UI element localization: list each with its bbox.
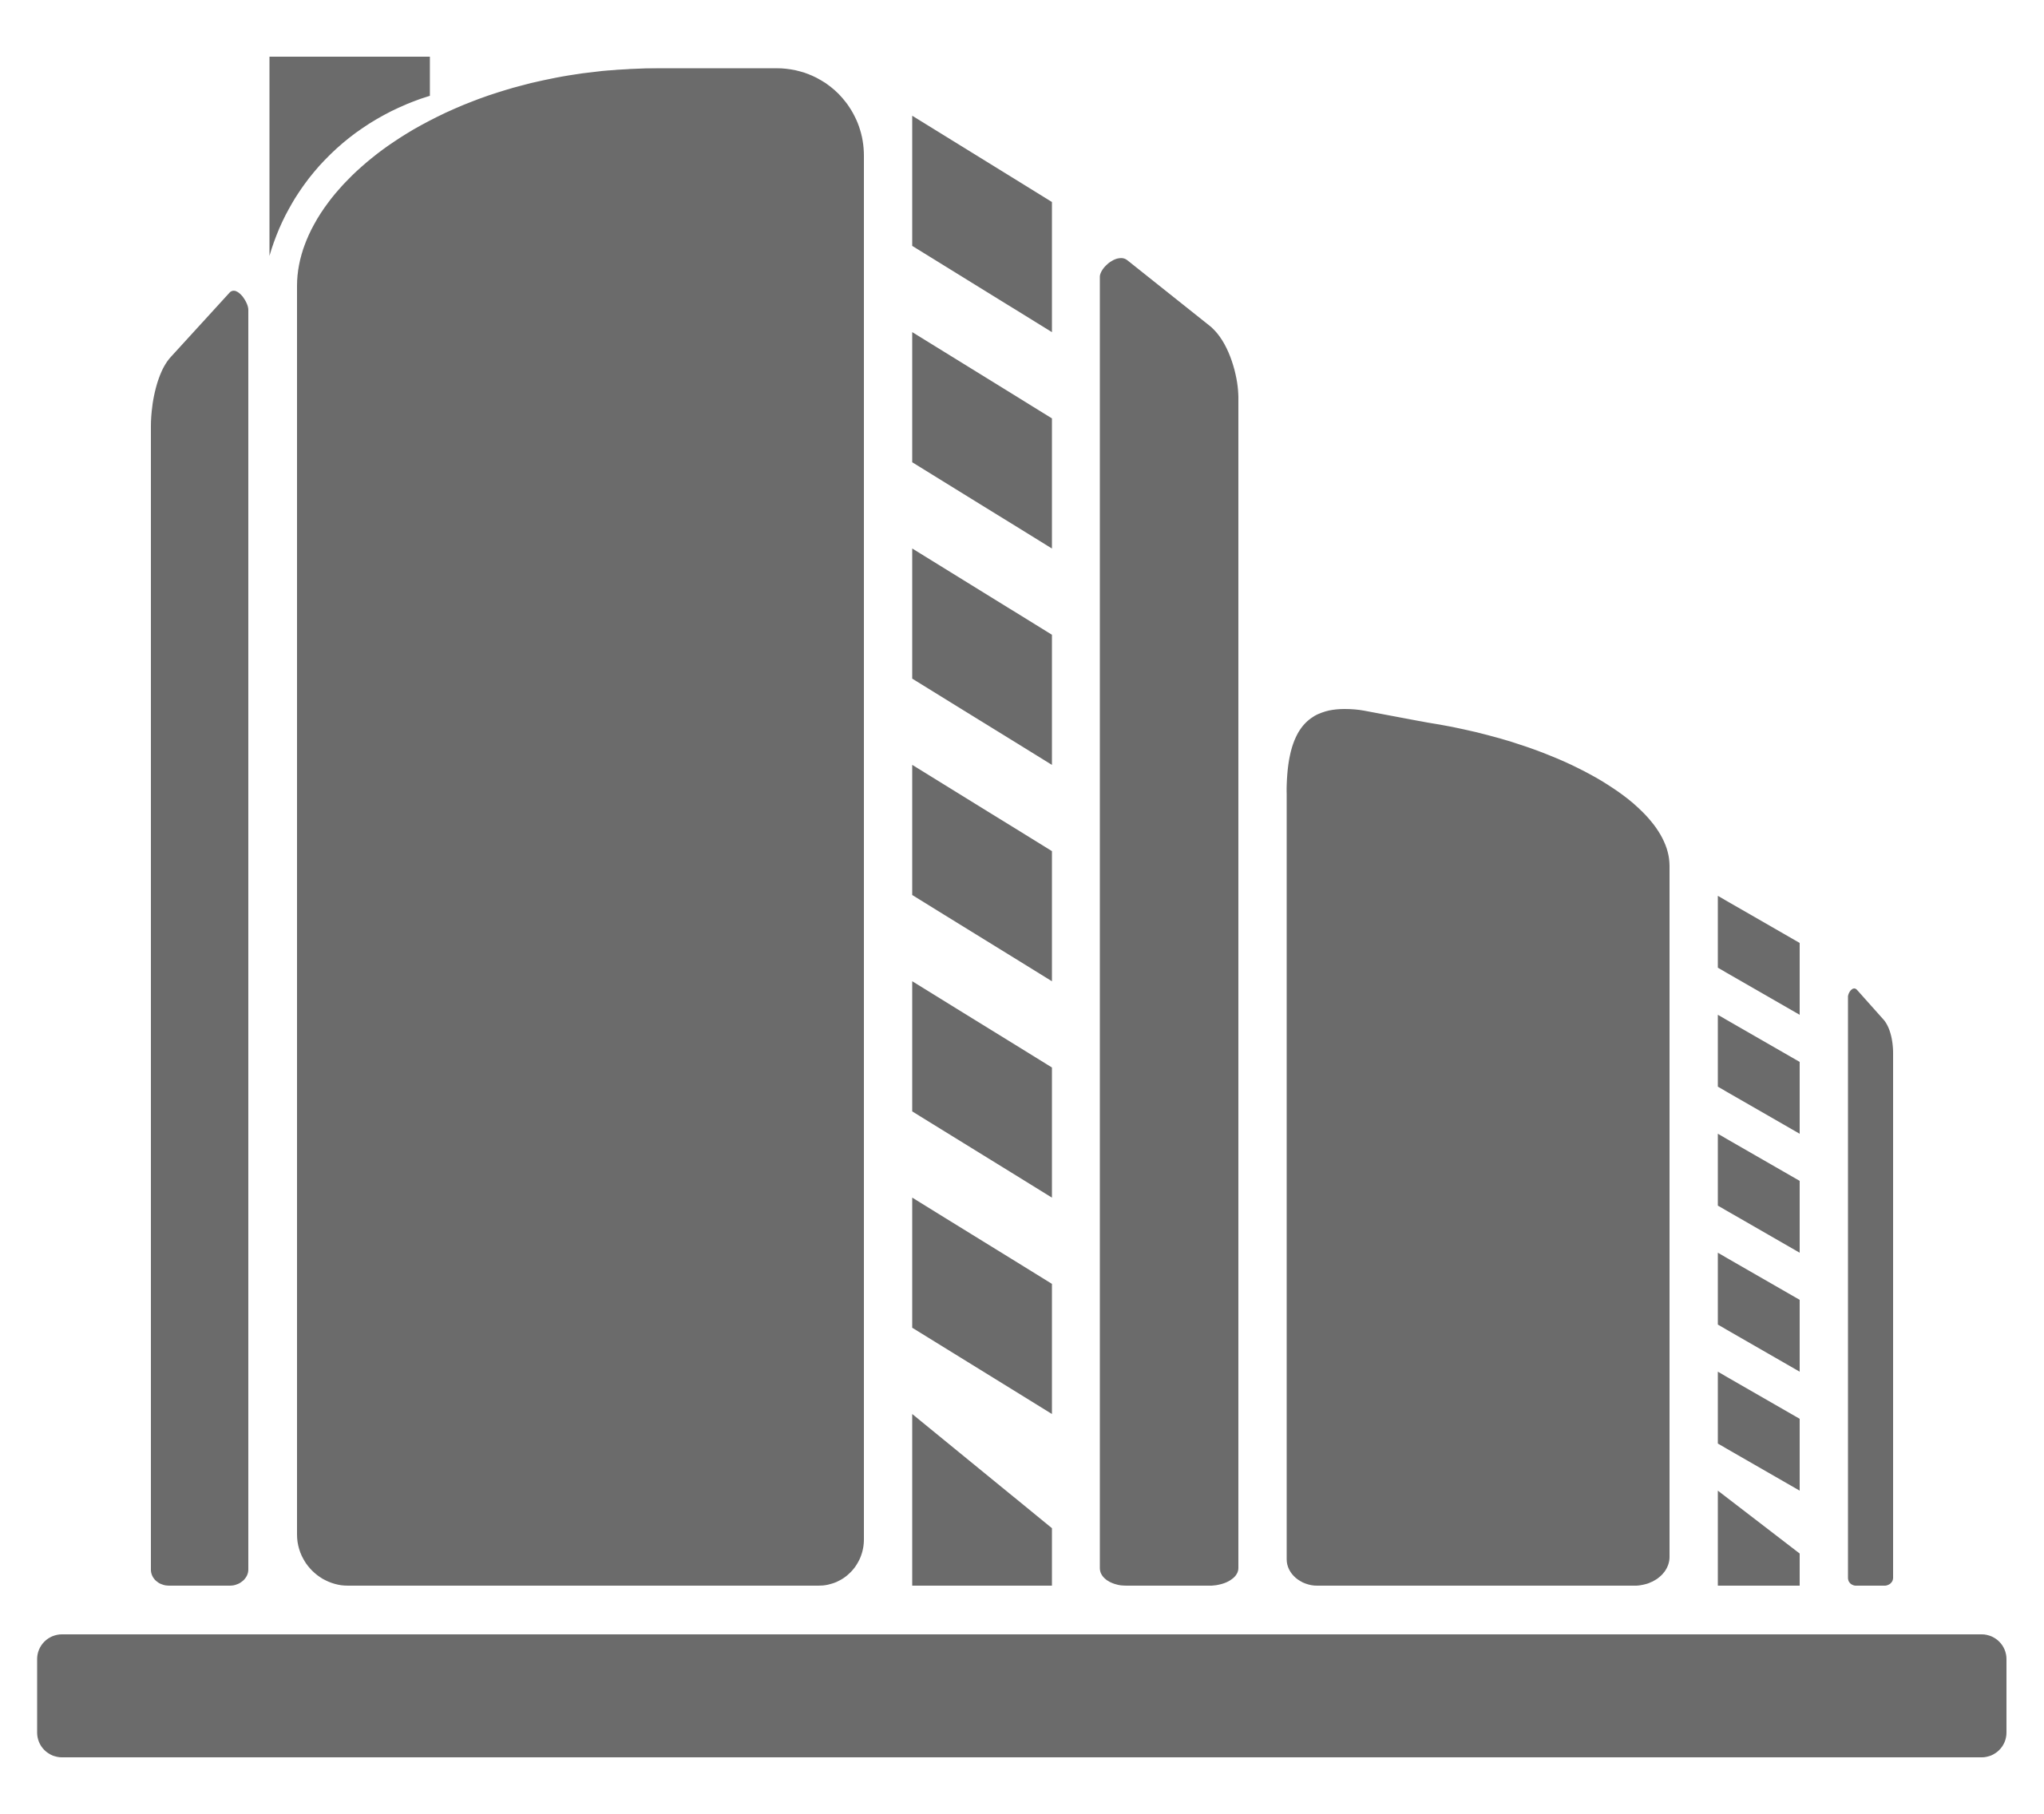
- small rooftop wedge behind main tower: [270, 57, 430, 255]
- window band 2: [912, 332, 1052, 549]
- left narrow tower: [151, 291, 248, 1586]
- far-right narrow tower: [1848, 988, 1893, 1586]
- small window band 3: [1718, 1134, 1800, 1253]
- small window band 6: base: [1718, 1491, 1800, 1586]
- main large tower: [297, 69, 864, 1586]
- small striped building: diagonal window bands: [1718, 896, 1800, 1586]
- small window band 2: [1718, 1015, 1800, 1134]
- medium curved-roof building: [1287, 709, 1670, 1586]
- ground base bar: [37, 1634, 2006, 1757]
- striped tower: diagonal window bands: [912, 116, 1052, 1586]
- small window band 4: [1718, 1253, 1800, 1372]
- window band 3: [912, 549, 1052, 765]
- small window band 5: [1718, 1372, 1800, 1491]
- window band 1: [912, 116, 1052, 332]
- window band 4: [912, 765, 1052, 981]
- window band 5: [912, 981, 1052, 1198]
- window band 7: base: [912, 1414, 1052, 1586]
- window band 6: [912, 1198, 1052, 1414]
- small window band 1: [1718, 896, 1800, 1015]
- tall slanted tower: [1100, 258, 1238, 1586]
